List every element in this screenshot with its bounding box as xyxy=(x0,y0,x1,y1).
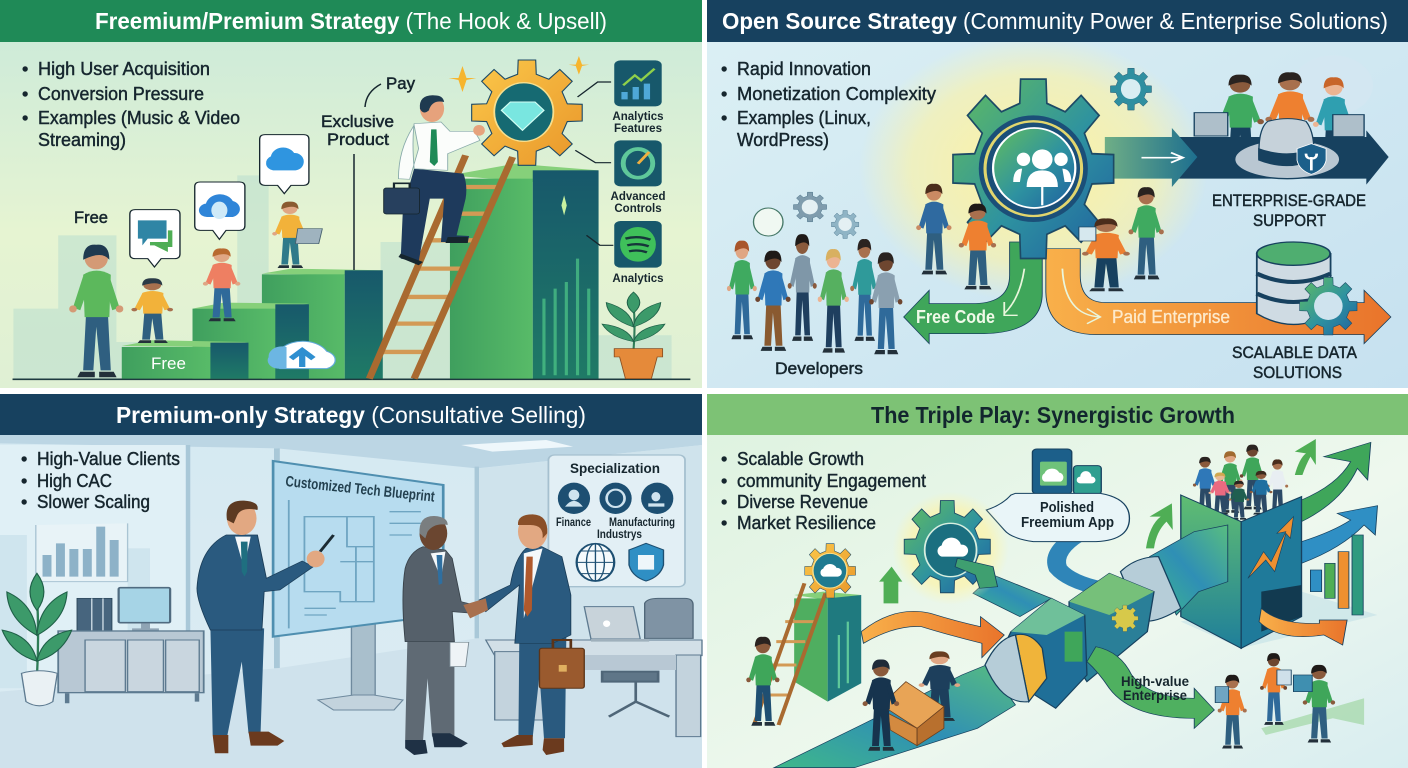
bullet list: triple play xyxy=(721,449,926,533)
arrows: growth xyxy=(879,439,1378,603)
arrow: to enterprise xyxy=(1105,128,1389,187)
person: user on step 3 xyxy=(272,202,308,268)
header: freemium xyxy=(0,0,702,42)
header: premium-only xyxy=(0,394,702,435)
person: consultant handshake xyxy=(463,514,584,755)
person: user sitting xyxy=(131,278,173,343)
speech bubble: database xyxy=(195,182,245,239)
icon: hat with shield xyxy=(1234,119,1340,179)
illustration: synergistic pipeline scene xyxy=(746,439,1378,768)
bullet list: premium-only: • xyxy=(21,492,27,512)
labels: free, pay, exclusive product: Product xyxy=(327,130,389,149)
tube to cube xyxy=(1150,525,1228,615)
desk, laptop and chair xyxy=(486,598,702,737)
label: customized tech blueprint: Customized Tech Blueprint xyxy=(285,473,436,506)
enterprise team xyxy=(1194,72,1364,174)
labels: open source flows: SCALABLE DATA xyxy=(1232,343,1358,362)
contributors around gear xyxy=(916,184,1164,291)
enterprise people xyxy=(1215,653,1335,749)
floating icons xyxy=(753,192,859,238)
plant xyxy=(602,292,665,379)
person: free user standing xyxy=(69,245,123,377)
speech bubble: cloud xyxy=(260,135,309,194)
bullet list: triple play: • xyxy=(721,513,727,533)
illustration: community gear scene xyxy=(727,35,1391,354)
bullet list: open source xyxy=(721,59,936,150)
person: user on step 2 xyxy=(203,248,240,321)
labels: open source flows: ENTERPRISE-GRADE xyxy=(1212,191,1366,210)
ladder xyxy=(369,155,513,379)
wall bar chart xyxy=(36,523,128,582)
bullet list: premium-only: High-Value Clients xyxy=(37,449,180,469)
bullet list: freemium: Examples (Music & Video xyxy=(38,108,240,128)
bullet list: premium-only: • xyxy=(21,449,27,469)
bullet list: open source: • xyxy=(721,108,727,128)
icon: cloud upload xyxy=(268,341,335,369)
small arrows on flows xyxy=(1004,269,1100,324)
bullet list: triple play: Scalable Growth xyxy=(737,449,864,469)
labels: feature icons: Advanced xyxy=(611,191,665,203)
labels: triple play callouts xyxy=(1021,500,1189,703)
left collar xyxy=(985,634,1047,702)
labels: feature icons: Analytics xyxy=(612,273,664,285)
bullet list: premium-only: High CAC xyxy=(37,471,112,491)
labels: free, pay, exclusive product xyxy=(74,74,415,373)
header: triple play: The Triple Play: Synergistic Growth xyxy=(871,402,1235,428)
bullet list: triple play: • xyxy=(721,449,727,469)
developers group xyxy=(727,234,902,354)
ribbon: app to pipeline xyxy=(1057,535,1100,588)
header: freemium: Freemium/Premium Strategy (The Hook & Upsell) xyxy=(95,8,607,34)
labels: specialization: Finance xyxy=(556,517,591,529)
labels: open source flows: Developers xyxy=(775,359,863,378)
small tower with ladder xyxy=(754,583,861,725)
person: climber xyxy=(746,637,780,726)
bullet list: open source: Examples (Linux, xyxy=(737,108,871,128)
hex block: right xyxy=(1069,573,1154,682)
bullet list: triple play: Market Resilience xyxy=(737,513,876,533)
laptop xyxy=(295,229,322,244)
bullet list: premium-only: Slower Scaling xyxy=(37,492,150,512)
bubble: polished freemium app xyxy=(986,493,1129,542)
bullet list: freemium: • xyxy=(22,108,28,128)
icon: briefcase xyxy=(539,640,584,688)
bullet list: open source: Rapid Innovation xyxy=(737,59,871,79)
gear: cloud key xyxy=(893,492,1009,605)
header: triple play xyxy=(707,394,1408,435)
labels: free, pay, exclusive product: Free xyxy=(151,354,186,373)
small gear xyxy=(1110,68,1152,110)
labels: feature icons xyxy=(611,111,665,285)
blueprint board xyxy=(273,461,443,710)
labels: open source flows xyxy=(775,191,1366,382)
bullet list: triple play: community Engagement xyxy=(737,471,926,491)
bullet list: open source: WordPress) xyxy=(737,130,829,150)
arrow: high-value enterprise xyxy=(1087,647,1214,728)
panel: premium-only strategy xyxy=(0,394,702,768)
hex block: left xyxy=(993,598,1087,708)
tower xyxy=(450,164,599,379)
person: client handshake xyxy=(403,516,475,755)
labels: feature icons: Features xyxy=(614,123,662,135)
bullet list: open source: Monetization Complexity xyxy=(737,84,936,104)
zigzag arrow xyxy=(1248,517,1293,578)
labels: triple play callouts: Freemium App xyxy=(1021,515,1114,531)
phone app xyxy=(1032,449,1101,494)
illustration: freemium ladder scene xyxy=(13,56,690,379)
labels: free, pay, exclusive product: Exclusive xyxy=(321,112,394,131)
illustration: consultative office scene xyxy=(0,435,702,768)
icon: database with gear xyxy=(1257,242,1357,335)
labels: open source flows: Paid Enterprise xyxy=(1112,307,1230,327)
header: premium-only: Premium-only Strategy (Consultative Selling) xyxy=(116,402,586,428)
bullet list: freemium: Conversion Pressure xyxy=(38,84,204,104)
arrow: paid enterprise xyxy=(1046,249,1391,344)
bullet list: freemium: • xyxy=(22,59,28,79)
labels: triple play callouts: Enterprise xyxy=(1123,687,1187,703)
gear: orange cloud xyxy=(805,544,856,598)
icon stack: premium features xyxy=(575,60,662,268)
gear: premium diamond xyxy=(449,56,589,165)
arrow: orange into pipeline xyxy=(861,611,1004,658)
bullet list: freemium: High User Acquisition xyxy=(38,59,210,79)
right collar xyxy=(1120,557,1181,621)
stair step 2 xyxy=(193,303,309,379)
band: gear to pipeline xyxy=(973,575,1051,617)
labels: free, pay, exclusive product: Pay xyxy=(386,74,415,93)
labels: specialization: Manufacturing xyxy=(609,517,675,529)
bullet list: premium-only: • xyxy=(21,471,27,491)
bullet list: triple play: • xyxy=(721,492,727,512)
panel: freemium premium strategy xyxy=(0,0,702,388)
arrow: free code xyxy=(904,242,1042,344)
bullet list: open source: • xyxy=(721,59,727,79)
labels: feature icons: Controls xyxy=(614,203,662,215)
labels: open source flows: SUPPORT xyxy=(1253,211,1326,230)
plant: office xyxy=(2,573,72,706)
bullet list: triple play: • xyxy=(721,471,727,491)
desk meeting xyxy=(863,651,960,751)
panel: specialization xyxy=(548,455,685,587)
arrow: orange out of cube xyxy=(1259,608,1347,645)
cabinet with binders and monitor xyxy=(58,588,204,703)
labels: triple play callouts: Polished xyxy=(1040,500,1094,516)
header: open source: Open Source Strategy (Community Power & Enterprise Solutions) xyxy=(722,8,1388,34)
header: open source xyxy=(707,0,1408,42)
path on floor xyxy=(774,665,1015,768)
bullet list: triple play: Diverse Revenue xyxy=(737,492,868,512)
labels: open source flows: SOLUTIONS xyxy=(1253,363,1342,382)
crowd on cube xyxy=(1193,445,1288,520)
labels: specialization: Industrys xyxy=(597,529,642,541)
speech bubble: chat xyxy=(130,210,180,267)
labels: feature icons: Analytics xyxy=(612,111,664,123)
cube xyxy=(1181,495,1302,648)
bullet list: premium-only xyxy=(21,449,180,512)
mini bar chart xyxy=(1310,535,1363,615)
labels: triple play callouts: High-value xyxy=(1121,673,1189,689)
labels: specialization: Specialization xyxy=(570,460,660,476)
person: consultant pointing xyxy=(197,501,334,753)
bullet list: open source: • xyxy=(721,84,727,104)
labels: free, pay, exclusive product: Free xyxy=(74,208,108,227)
labels: specialization xyxy=(556,460,675,541)
bullet list: freemium: Streaming) xyxy=(38,130,126,150)
panel: triple play xyxy=(707,394,1408,768)
panel: open source strategy xyxy=(707,0,1408,388)
bullet list: freemium: • xyxy=(22,84,28,104)
stair step 3 xyxy=(262,269,383,379)
labels: open source flows: Free Code xyxy=(916,307,995,327)
stair step 1 xyxy=(122,340,248,379)
bullet list: freemium xyxy=(22,59,240,150)
gear: community xyxy=(953,79,1114,259)
person: climber with briefcase xyxy=(384,95,485,265)
